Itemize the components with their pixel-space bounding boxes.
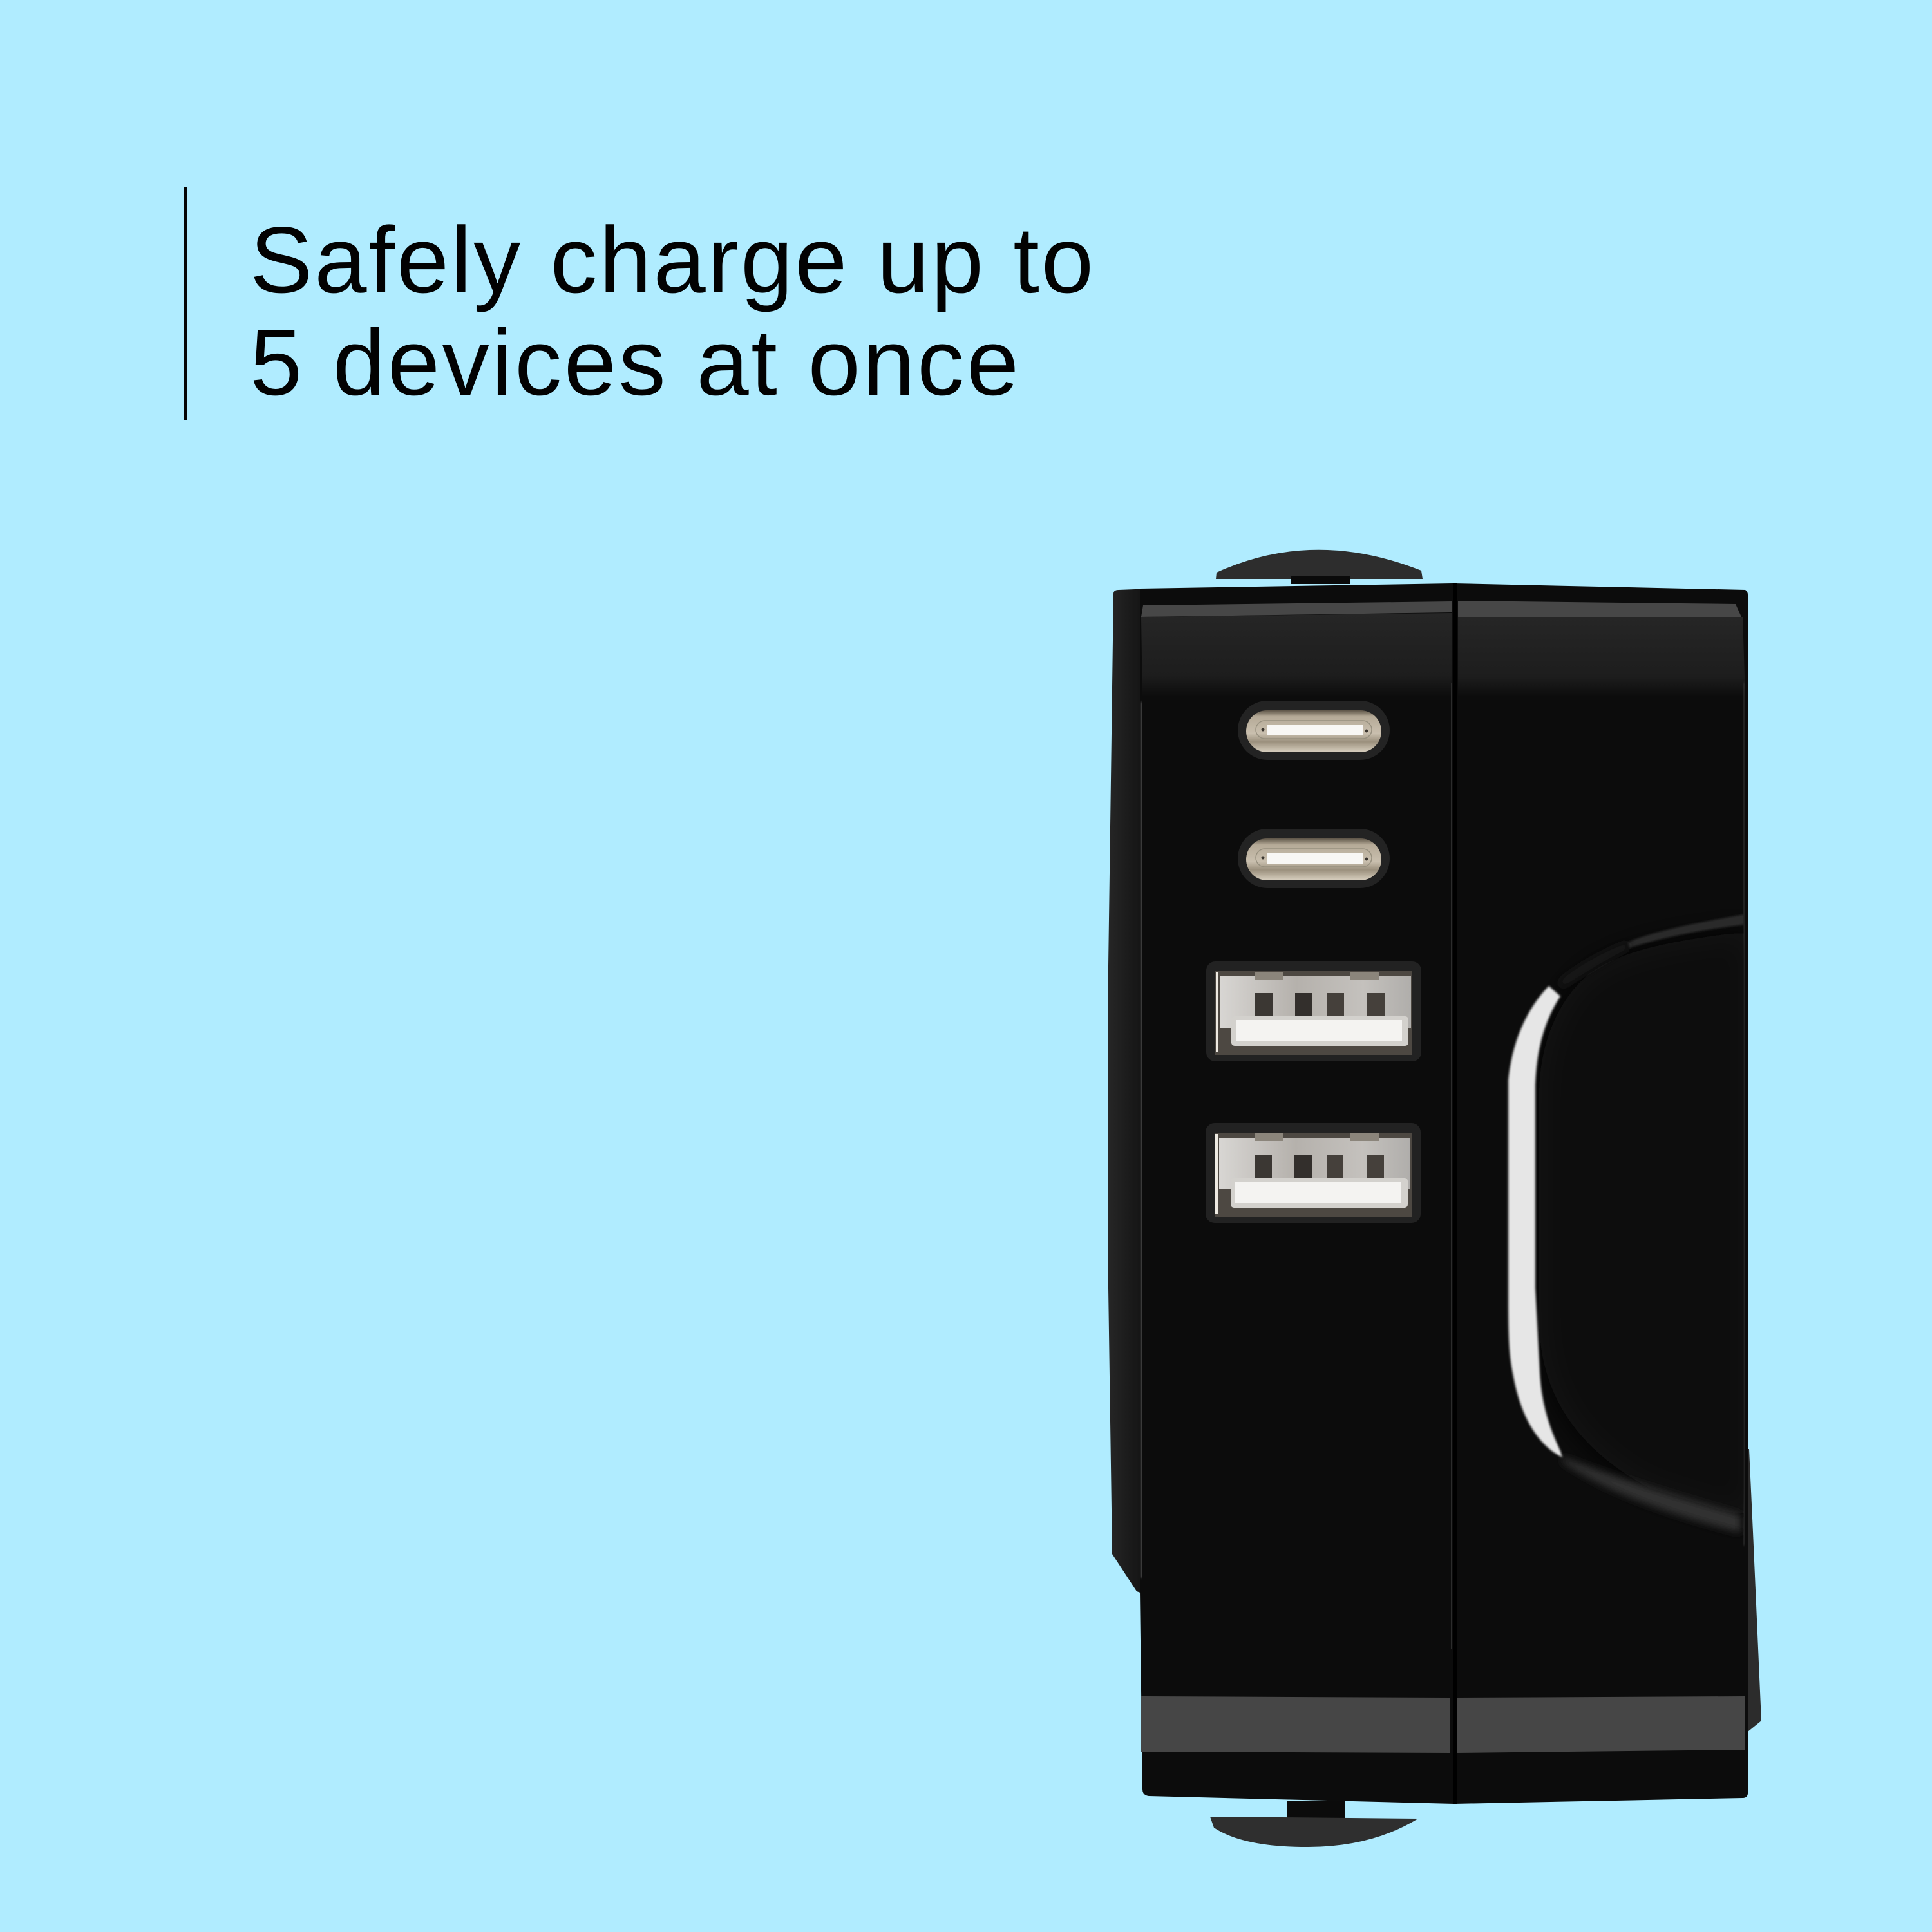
right edge highlight — [1743, 683, 1745, 1546]
main body — [1140, 583, 1748, 1804]
top highlight band right — [1458, 601, 1741, 617]
rear strip on right side — [1743, 1449, 1761, 1732]
USB-C port 2 — [1238, 829, 1390, 888]
top rubber nub — [1216, 550, 1423, 584]
top shaded face right — [1458, 617, 1745, 697]
USB-A port 1 — [1206, 961, 1421, 1061]
heading — [250, 207, 1094, 415]
bottom rubber nub — [1210, 1801, 1418, 1847]
grip recess — [1508, 914, 1752, 1533]
heading: Safely charge up to — [250, 207, 1094, 312]
bottom band right — [1456, 1696, 1745, 1753]
USB-A port 2 — [1206, 1123, 1421, 1223]
recess shoulder shading — [1562, 945, 1625, 984]
recess top edge — [1628, 914, 1744, 948]
divider bar beside heading — [184, 187, 187, 420]
bottom band left — [1141, 1696, 1450, 1753]
product: black USB charger — [1108, 550, 1761, 1847]
USB-C port 1 — [1238, 701, 1390, 760]
crescent highlight — [1508, 986, 1562, 1457]
top highlight band left — [1141, 601, 1452, 617]
rear left rim — [1108, 589, 1153, 1597]
soft lower reflection — [1562, 1457, 1741, 1533]
left face edge highlight — [1141, 702, 1142, 1578]
infographic canvas — [184, 187, 1761, 1847]
centre seam — [1451, 583, 1457, 1804]
heading: 5 devices at once — [250, 310, 1019, 415]
top shaded face left — [1141, 613, 1452, 697]
